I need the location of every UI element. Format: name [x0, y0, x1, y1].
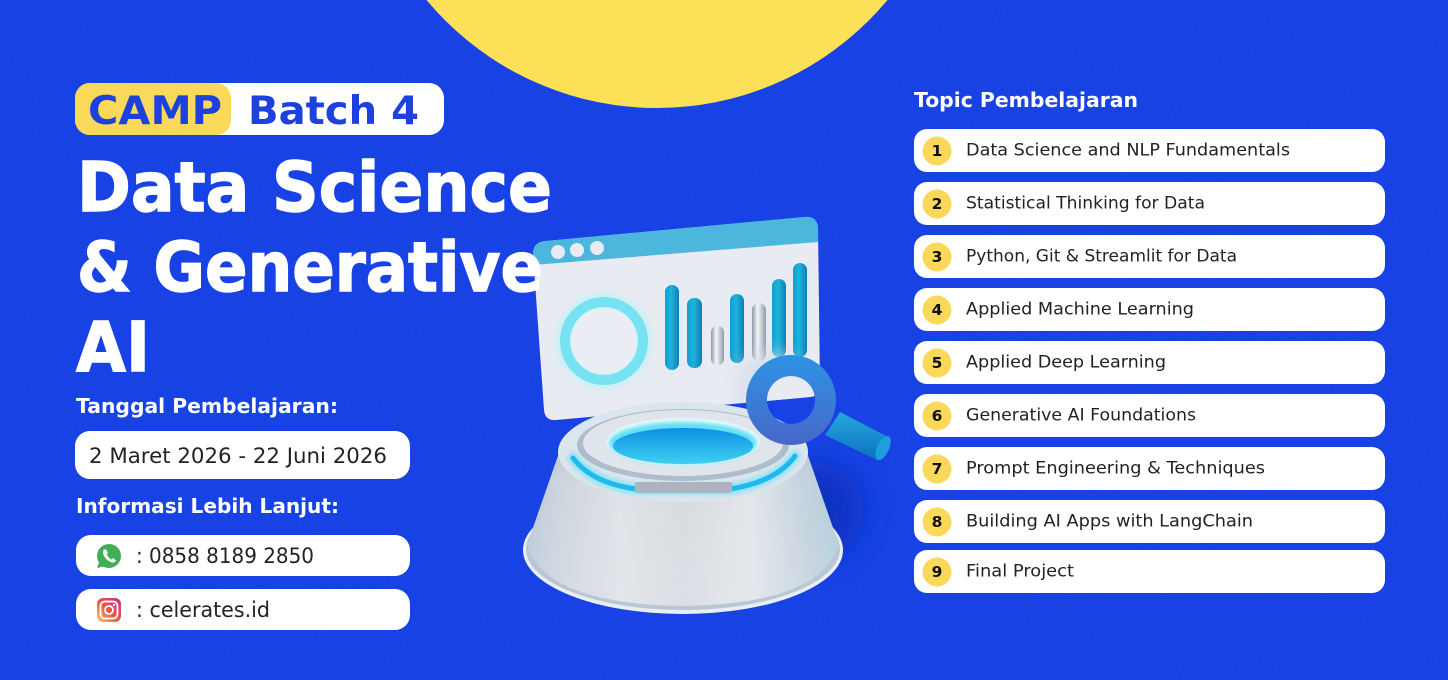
icon: whatsapp [97, 544, 121, 568]
topic 5 [914, 341, 1385, 384]
topic list [914, 129, 1385, 593]
pedestal [523, 402, 843, 614]
topic 5: 5 [932, 354, 942, 372]
topic 9: Final Project [966, 562, 1074, 582]
topic 1: 1 [932, 142, 942, 160]
topic 3 [914, 235, 1385, 278]
CAMP label: CAMP [88, 89, 222, 134]
topic 2: Statistical Thinking for Data [966, 194, 1205, 214]
main title: & Generative [77, 228, 543, 308]
whatsapp pill: : 0858 8189 2850 [136, 544, 314, 568]
main title [76, 148, 552, 388]
instagram pill [76, 589, 410, 630]
batch label: Batch 4 [248, 89, 419, 134]
heading: topics: Topic Pembelajaran [914, 88, 1138, 112]
main title: AI [76, 308, 150, 388]
topic 2 [914, 182, 1385, 225]
topic 4: Applied Machine Learning [966, 300, 1194, 320]
topic 8: Building AI Apps with LangChain [966, 512, 1253, 532]
glowing well [606, 418, 760, 466]
topic 9: 9 [932, 563, 942, 581]
topic 8 [914, 500, 1385, 543]
topic 8: 8 [932, 513, 942, 531]
topic 3: 3 [932, 248, 942, 266]
instagram pill: : celerates.id [136, 598, 270, 622]
topic 2: 2 [932, 195, 942, 213]
illustration: dashboard on pedestal [523, 217, 894, 614]
pedestal shadow [767, 462, 863, 558]
topic 7 [914, 447, 1385, 490]
bar chart [665, 263, 807, 370]
topic 6: 6 [932, 407, 942, 425]
topic 4 [914, 288, 1385, 331]
heading: learning dates: Tanggal Pembelajaran: [76, 394, 338, 418]
main title: Data Science [77, 148, 552, 228]
topic 7: 7 [932, 460, 942, 478]
icon: instagram [97, 598, 121, 622]
topic 1 [914, 129, 1385, 172]
heading: more information: Informasi Lebih Lanjut: [76, 494, 339, 518]
date pill [75, 431, 410, 479]
whatsapp pill [76, 535, 410, 576]
ring chart [565, 302, 643, 380]
topic 6 [914, 394, 1385, 437]
glowing cyan band [573, 456, 795, 489]
date pill: 2 Maret 2026 - 22 Juni 2026 [89, 444, 387, 469]
decorative yellow circle [357, 0, 957, 108]
badge: CAMP Batch 4 [75, 83, 444, 135]
topic 7: Prompt Engineering & Techniques [966, 458, 1265, 478]
topic 3: Python, Git & Streamlit for Data [966, 246, 1237, 266]
topic 5: Applied Deep Learning [966, 352, 1166, 372]
topic 9 [914, 550, 1385, 593]
dashboard window [533, 217, 820, 420]
topic 6: Generative AI Foundations [966, 406, 1196, 426]
magnifying glass [736, 351, 894, 462]
topic 4: 4 [932, 301, 943, 319]
topic 1: Data Science and NLP Fundamentals [966, 140, 1290, 160]
